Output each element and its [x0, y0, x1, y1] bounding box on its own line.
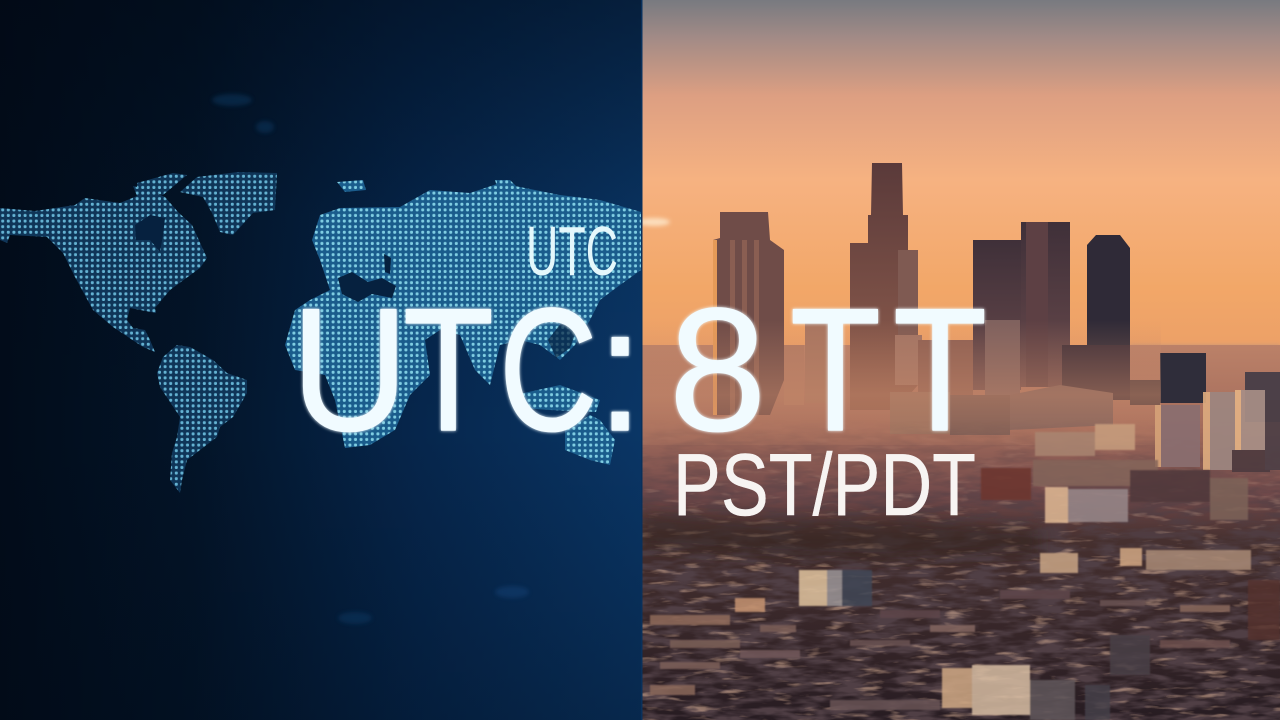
- sun glint: [638, 218, 670, 226]
- title: UTC: 8TT: C: [499, 273, 598, 468]
- map: Greenland: [180, 172, 277, 235]
- panel: navy world side: [0, 0, 643, 720]
- title: UTC: 8TT: T: [403, 273, 494, 468]
- map: dark inland seas: [135, 215, 578, 358]
- label: small UTC: UTC: [526, 212, 618, 290]
- left seam: [641, 0, 642, 720]
- map: Eurasia and Africa: [285, 183, 641, 448]
- dark tree band: [641, 512, 1040, 560]
- low haze over tower bases: [641, 320, 1161, 445]
- lit city blocks: [650, 424, 1280, 720]
- right side high-rises: [1155, 390, 1280, 472]
- sky: [642, 0, 1280, 345]
- city texture: [641, 420, 1280, 720]
- map: South America: [157, 345, 247, 493]
- panel: Los Angeles skyline side: [638, 0, 1280, 720]
- map: northern islands: [337, 180, 520, 192]
- map: Arctic islands: [137, 173, 187, 195]
- map: North America: [0, 186, 207, 352]
- ground haze: [641, 345, 1280, 720]
- title: UTC: 8TT: U: [291, 272, 409, 467]
- dotted world map: [0, 172, 641, 493]
- title: UTC: 8TT: [291, 272, 987, 468]
- title: UTC: 8TT: 8: [669, 273, 766, 468]
- title: UTC: 8TT: T: [893, 272, 987, 467]
- title: UTC: 8TT: :: [597, 272, 643, 468]
- map: Australia: [565, 415, 615, 465]
- horizon haze: [1130, 344, 1280, 345]
- label: PST/PDT: PST/PDT: [673, 435, 976, 534]
- title: UTC: 8TT: T: [790, 273, 881, 468]
- map: Southeast Asian islands: [515, 385, 600, 412]
- skyline towers: [713, 163, 1280, 435]
